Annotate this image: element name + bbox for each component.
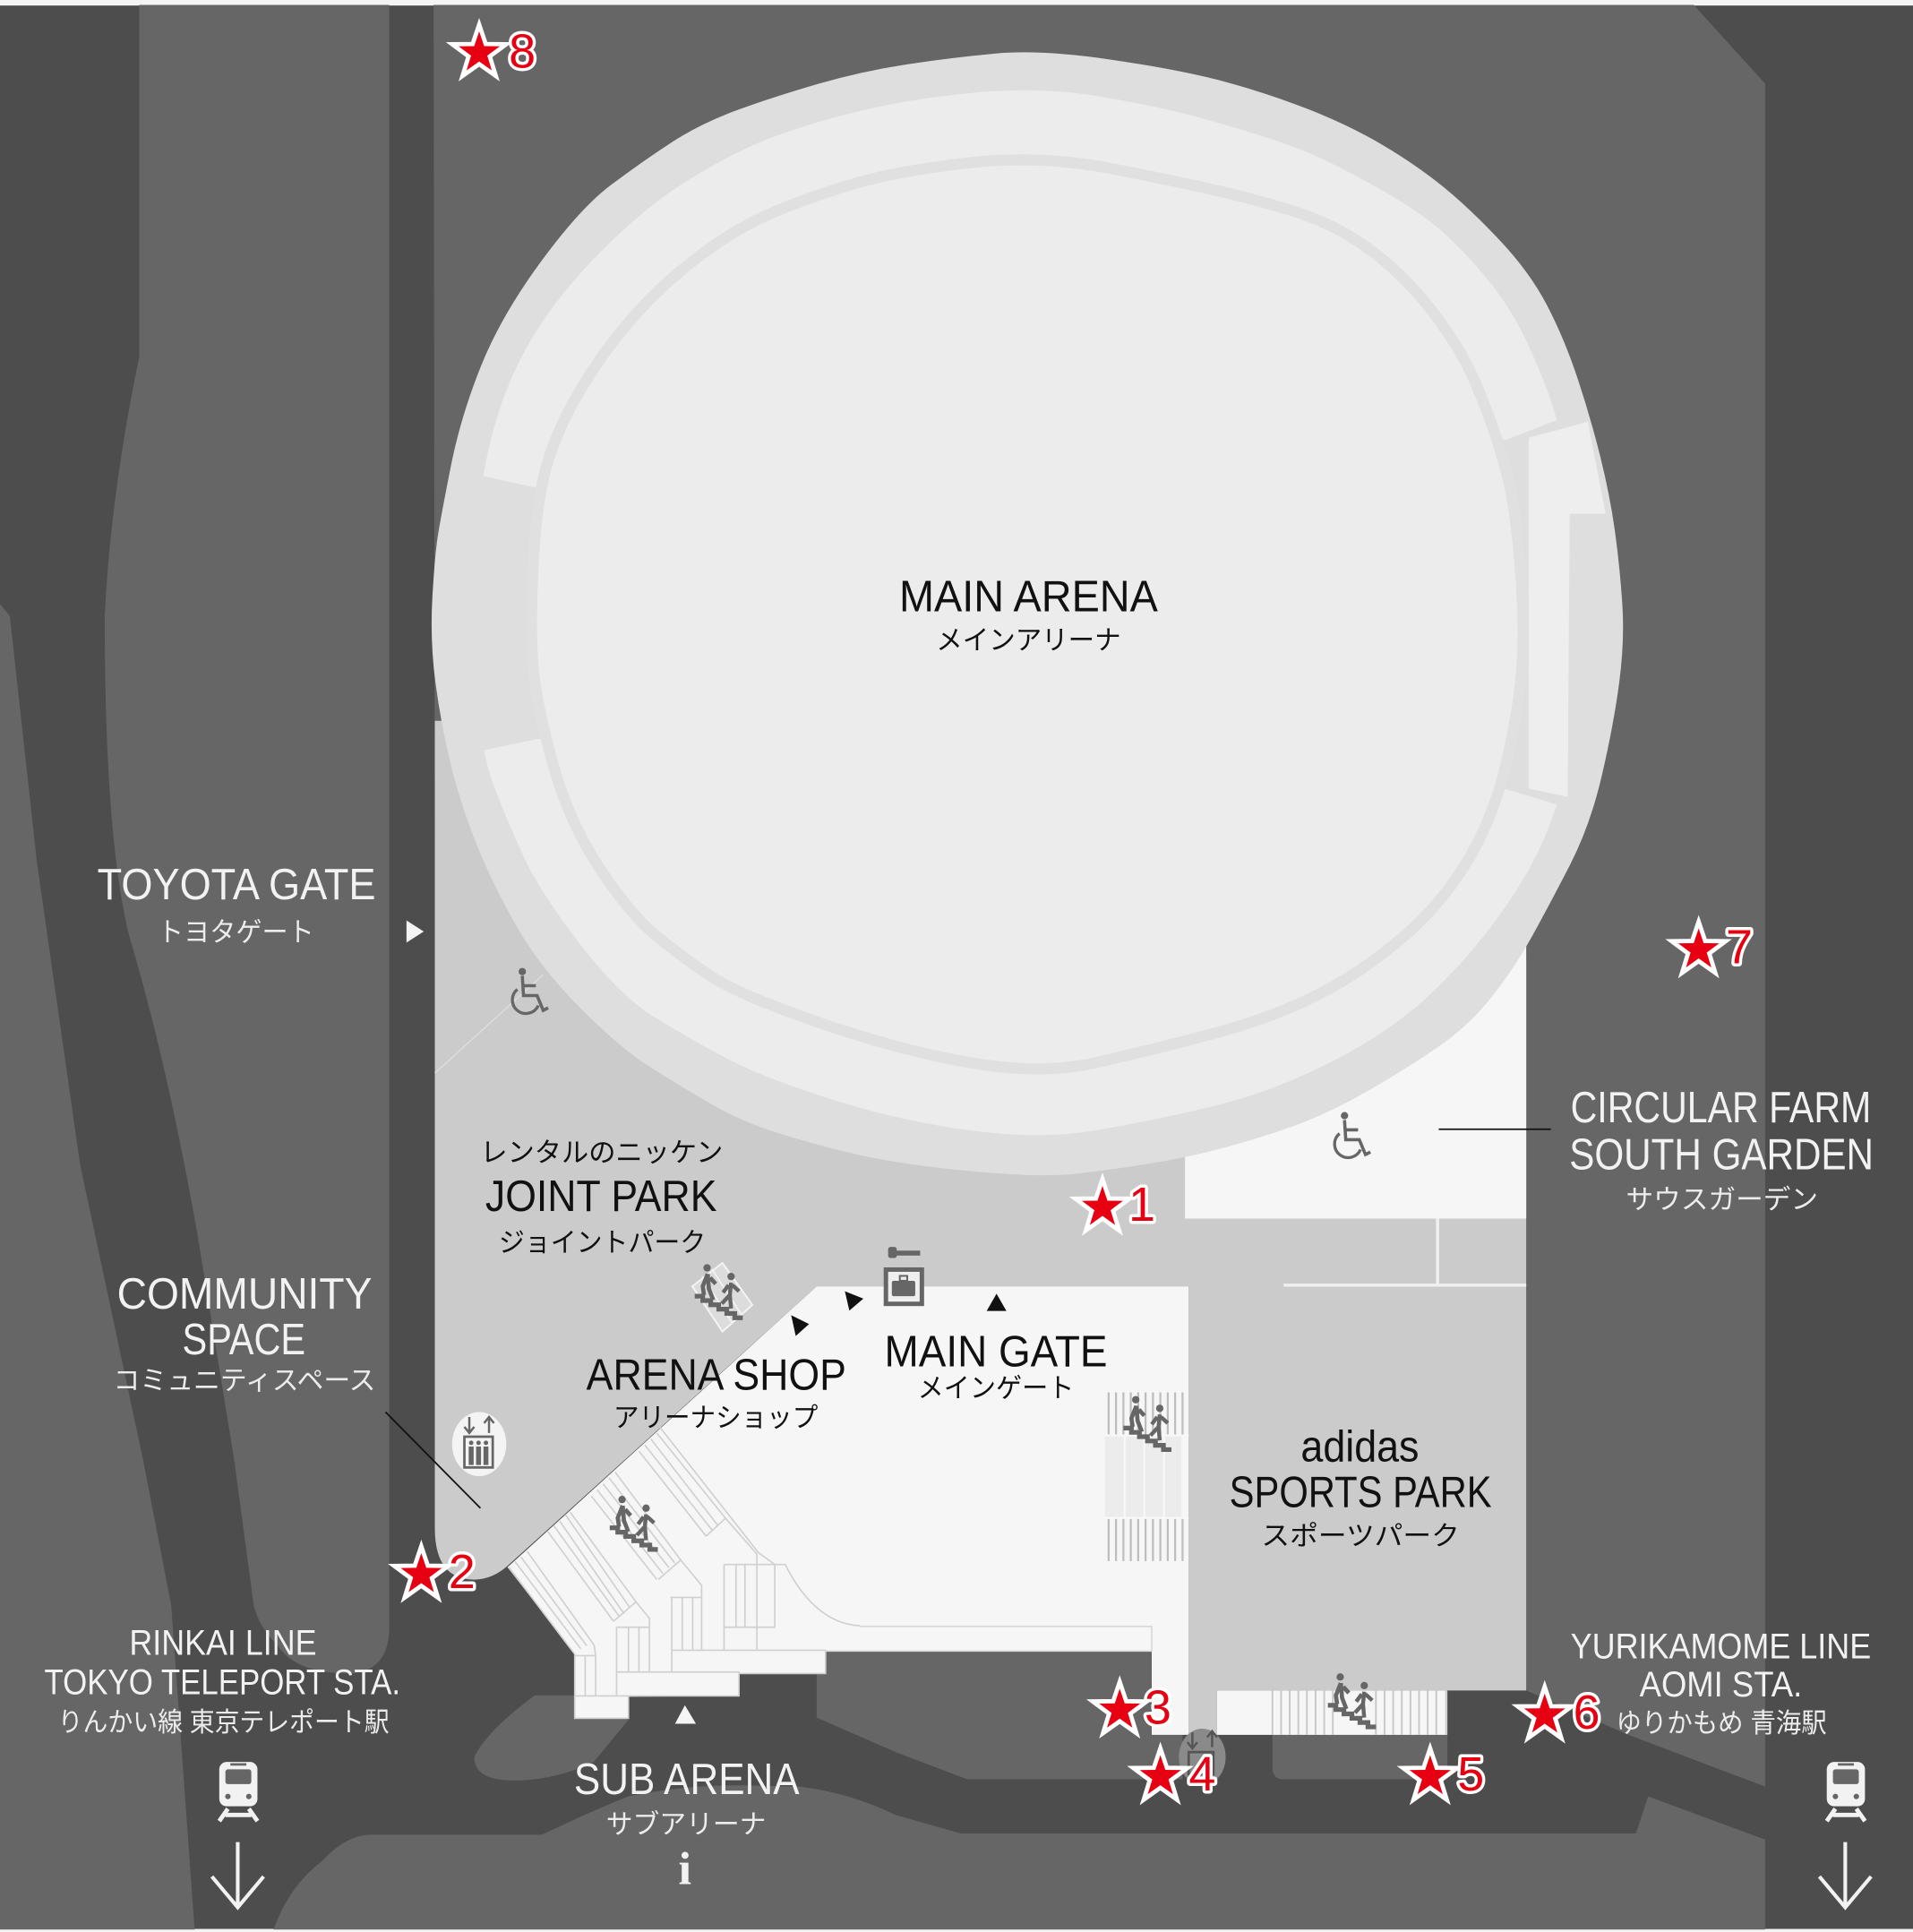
label: main gate: MAIN GATE [885, 1327, 1107, 1377]
icon: key [888, 1247, 920, 1258]
marker: star 7: 7 [1726, 921, 1753, 975]
arrow: arena shop entrance right [845, 1292, 863, 1310]
label: circular farm south garden: サウスガーデン [1626, 1184, 1818, 1215]
arrow: to rinkai line [212, 1842, 263, 1907]
label: toyota gate: TOYOTA GATE [98, 860, 375, 909]
label: joint park [480, 1138, 723, 1258]
marker: star 6 [1518, 1686, 1600, 1739]
label: rinkai line: RINKAI LINE [129, 1623, 316, 1662]
ground: block under south stairs [1273, 1725, 1447, 1779]
leader line: community space [386, 1412, 480, 1508]
label: community space [114, 1269, 375, 1396]
marker: star 6: 6 [1574, 1686, 1600, 1739]
ground: far left strip [0, 604, 194, 1929]
label: adidas sports park: SPORTS PARK [1230, 1467, 1492, 1516]
bottom edge strip [0, 1929, 1913, 1932]
main arena building [432, 52, 1623, 1175]
marker: star 5 [1403, 1747, 1484, 1801]
label: main arena: メインアリーナ [936, 626, 1121, 656]
icon: elevator south [1179, 1729, 1226, 1785]
arrow: to yurikamome line [1819, 1842, 1871, 1907]
marker: star 7 [1672, 921, 1753, 975]
label: community space: COMMUNITY [117, 1269, 372, 1318]
label: main arena: MAIN ARENA [899, 571, 1158, 621]
marker: star 4 [1134, 1747, 1215, 1801]
marker: star 2: 2 [449, 1545, 476, 1599]
main gate terrace [508, 1286, 1188, 1735]
label: main gate [885, 1327, 1107, 1404]
ground: left central strip [105, 5, 390, 1673]
ground: lower plaza [273, 1785, 1765, 1929]
icon: elevator joint park [452, 1412, 506, 1476]
label: rinkai line [45, 1623, 400, 1738]
marker: star 4: 4 [1188, 1747, 1215, 1801]
label: rinkai line: りんかい線 東京テレポート駅 [58, 1707, 390, 1738]
sports park dividers [1283, 1219, 1526, 1285]
wheelchair route line [435, 975, 544, 1073]
icon: stairs south [1328, 1673, 1376, 1727]
east stairs stripes [1105, 1392, 1188, 1561]
label: adidas sports park: adidas [1300, 1422, 1419, 1472]
label: yurikamome line [1571, 1627, 1871, 1739]
ground: block under roof [817, 1651, 1182, 1779]
arrow: toyota gate [407, 921, 424, 942]
label: sub arena [574, 1755, 800, 1840]
label: yurikamome line: YURIKAMOME LINE [1571, 1627, 1871, 1667]
arrow: sub arena entrance [675, 1705, 696, 1724]
label: yurikamome line: ゆりかもめ 青海駅 [1617, 1708, 1827, 1739]
arrow: arena shop entrance left [791, 1315, 809, 1336]
south stairs [1217, 1690, 1447, 1735]
label: community space: SPACE [183, 1315, 305, 1364]
arrow: main gate entrance [987, 1293, 1007, 1311]
marker: star 5: 5 [1457, 1747, 1484, 1801]
ground: arena plaza [433, 5, 1765, 1787]
icon: wheelchair south garden [1334, 1112, 1370, 1157]
marker: star 1 [1076, 1178, 1155, 1232]
icon: information: i [678, 1842, 691, 1894]
label: joint park: レンタルのニッケン [480, 1138, 723, 1168]
label: joint park: ジョイントパーク [499, 1229, 706, 1258]
label: adidas sports park [1230, 1422, 1492, 1551]
marker: star 2 [394, 1545, 476, 1599]
label: adidas sports park: スポーツパーク [1261, 1521, 1460, 1551]
label: main gate: メインゲート [918, 1374, 1074, 1404]
label: circular farm south garden [1569, 1083, 1874, 1215]
marker: star 3 [1093, 1681, 1171, 1735]
icon: stairs joint park [692, 1263, 752, 1332]
label: main arena [899, 571, 1158, 656]
label: toyota gate [98, 860, 375, 948]
icon: stairs east [1123, 1396, 1171, 1449]
marker: star 8 [452, 25, 536, 79]
building: concourse and sports park [435, 721, 1526, 1735]
roof band [826, 1627, 1152, 1651]
terrace stairs line work [509, 1427, 860, 1718]
top edge strip [0, 0, 1913, 5]
label: toyota gate: トヨタゲート [158, 918, 314, 948]
marker: star 1: 1 [1128, 1178, 1155, 1232]
ground: small island [475, 1696, 628, 1781]
icon: stairs terrace [610, 1496, 657, 1550]
label: community space: コミュニティスペース [114, 1367, 375, 1396]
label: yurikamome line: AOMI STA. [1640, 1665, 1802, 1704]
label: sub arena: サブアリーナ [606, 1809, 767, 1840]
icon: train left [219, 1762, 257, 1821]
leader line: south garden [1438, 1129, 1551, 1130]
icon: luggage locker [886, 1269, 922, 1304]
label: rinkai line: TOKYO TELEPORT STA. [45, 1662, 400, 1703]
label: sub arena: SUB ARENA [574, 1755, 800, 1804]
label: arena shop: ARENA SHOP [587, 1351, 846, 1400]
label: arena shop: アリーナショップ [613, 1404, 818, 1433]
label: arena shop [587, 1351, 846, 1433]
marker: star 3: 3 [1145, 1681, 1171, 1735]
icon: wheelchair west [512, 968, 548, 1013]
marker: star 8: 8 [509, 25, 536, 79]
icon: train right [1827, 1762, 1865, 1821]
south garden [1185, 863, 1526, 1219]
label: joint park: JOINT PARK [485, 1172, 716, 1221]
